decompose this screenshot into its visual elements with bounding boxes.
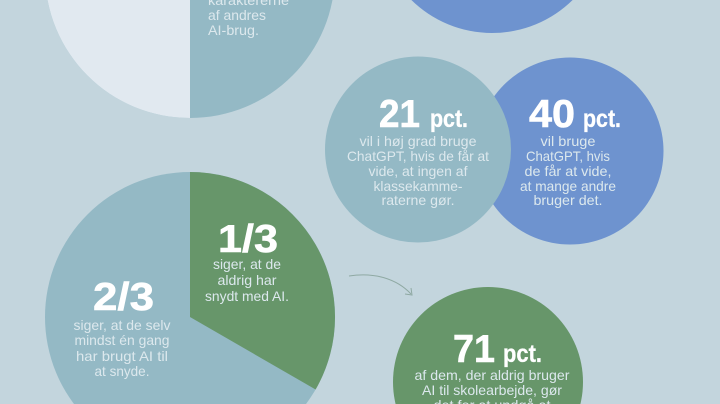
text: 71 pct caption xyxy=(414,367,570,404)
text: 2/3 caption: siger, at de selv xyxy=(74,317,170,333)
text: 21 pct caption: ChatGPT, hvis de får at xyxy=(347,148,489,164)
stat: 71 pct: 71 xyxy=(453,328,495,371)
stat: 21 pct xyxy=(379,93,468,136)
panel: bottom pie chart xyxy=(45,172,335,404)
text: 21 pct caption: vide, at ingen af xyxy=(368,163,468,179)
stat: 21 pct: pct. xyxy=(430,105,468,133)
stat: 2/3: 2/3 xyxy=(93,276,154,319)
text: 2/3 caption: har brugt AI til xyxy=(76,348,168,364)
arrow: curved pointer to 71 pct circle xyxy=(349,275,412,295)
stat: 71 pct xyxy=(453,328,542,371)
text: 2/3 caption: mindst én gang xyxy=(74,332,170,348)
panel: 21 pct circle xyxy=(325,56,511,242)
text: 40 pct caption: bruger det. xyxy=(534,192,602,208)
text: 2/3 caption: at snyde. xyxy=(94,363,150,379)
text: top pie caption: AI-brug. xyxy=(208,22,259,38)
text: top pie caption xyxy=(208,0,289,38)
circle: top blue partial xyxy=(377,0,607,33)
text: 1/3 caption: snydt med AI. xyxy=(205,288,289,304)
text: 1/3 caption: siger, at de xyxy=(213,256,281,272)
text: 21 pct caption: vil i høj grad bruge xyxy=(360,133,477,149)
text: 40 pct caption: de får at vide, xyxy=(524,163,612,179)
stat: 40 pct xyxy=(529,93,621,136)
text: 71 pct caption: AI til skolearbejde, gør xyxy=(422,382,562,398)
text: 71 pct caption: af dem, der aldrig bruger xyxy=(414,367,570,383)
panel: 71 pct circle xyxy=(393,287,583,404)
panel: 40 pct circle xyxy=(476,58,664,244)
text: 40 pct caption: at mange andre xyxy=(520,178,616,194)
stat: 40 pct: pct. xyxy=(583,105,621,133)
panel: top half pie chart xyxy=(45,0,335,118)
stat: 40 pct: 40 xyxy=(529,93,575,136)
text: top pie caption: af andres xyxy=(208,7,266,23)
text: 1/3 caption: aldrig har xyxy=(218,272,277,288)
text: 21 pct caption xyxy=(347,133,489,208)
text: 1/3 caption xyxy=(205,256,289,304)
text: 2/3 caption xyxy=(74,317,170,379)
text: 21 pct caption: raterne gør. xyxy=(382,192,454,208)
text: 40 pct caption: vil bruge xyxy=(540,133,596,149)
text: 21 pct caption: klassekamme- xyxy=(374,178,463,194)
stat: 21 pct: 21 xyxy=(379,93,420,136)
stat: 1/3: 1/3 xyxy=(218,218,278,261)
stat: 71 pct: pct. xyxy=(503,340,542,368)
text: 40 pct caption: ChatGPT, hvis xyxy=(526,148,610,164)
text: 40 pct caption xyxy=(520,133,616,208)
pie slice: one third xyxy=(190,172,335,390)
